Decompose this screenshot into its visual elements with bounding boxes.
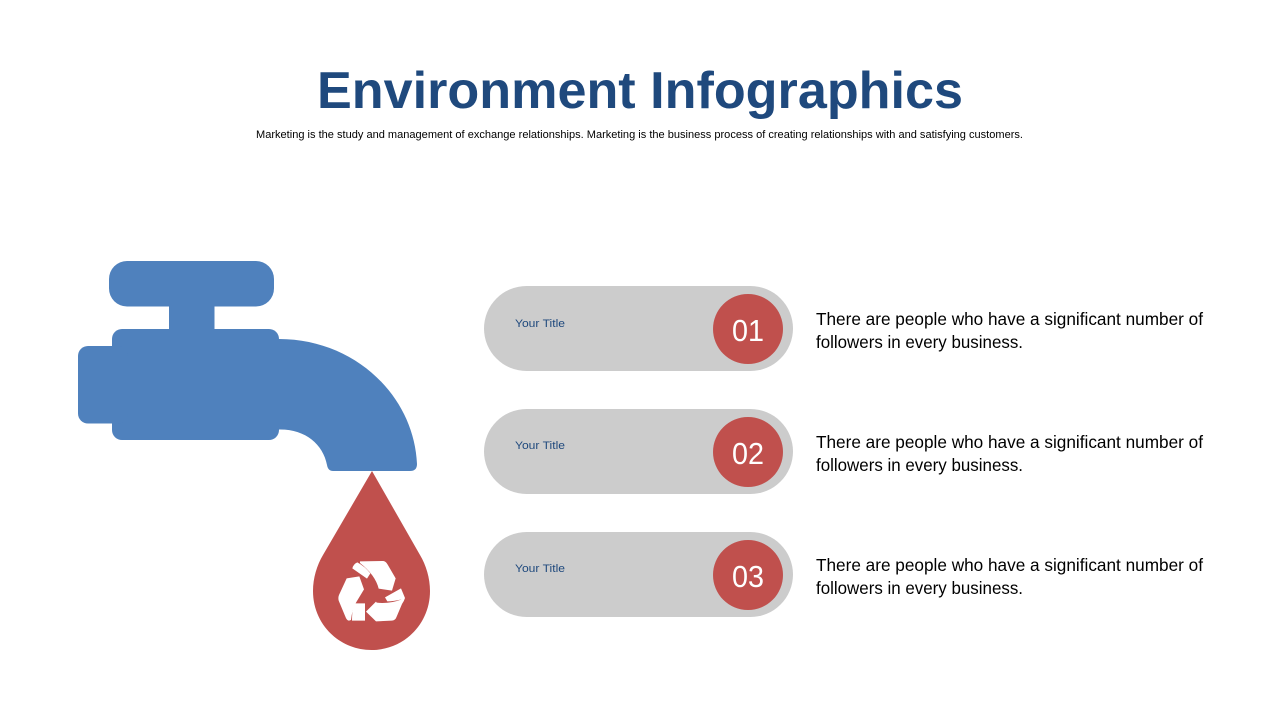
pill background (484, 532, 793, 617)
pill background (484, 286, 793, 371)
description: followers in every business. (816, 578, 1023, 598)
item title: Your Title (515, 563, 565, 575)
panel: item 02 (484, 409, 1203, 494)
subtitle text: Marketing is the study and management of exchange relationships. Marketing is the business process of creating relationships with and satisfying customers. (256, 129, 1023, 141)
item title: Your Title (515, 318, 565, 330)
icon: water faucet (78, 261, 417, 471)
recycling symbol (338, 561, 405, 621)
item title: Your Title (515, 440, 565, 452)
title: Environment Infographics (317, 62, 963, 120)
number badge: 03 (732, 559, 764, 594)
description: There are people who have a significant number of (816, 309, 1203, 329)
description: followers in every business. (816, 332, 1023, 352)
number badge (713, 294, 783, 364)
pill background (484, 409, 793, 494)
description: There are people who have a significant number of (816, 555, 1203, 575)
number badge (713, 540, 783, 610)
number badge: 02 (732, 436, 764, 471)
description: followers in every business. (816, 455, 1023, 475)
description: There are people who have a significant number of (816, 432, 1203, 452)
water drop (313, 471, 430, 650)
number badge: 01 (732, 313, 764, 348)
number badge (713, 417, 783, 487)
icon: water drop with recycling symbol (313, 471, 430, 650)
panel: item 03 (484, 532, 1203, 617)
panel: item 01 (484, 286, 1203, 371)
